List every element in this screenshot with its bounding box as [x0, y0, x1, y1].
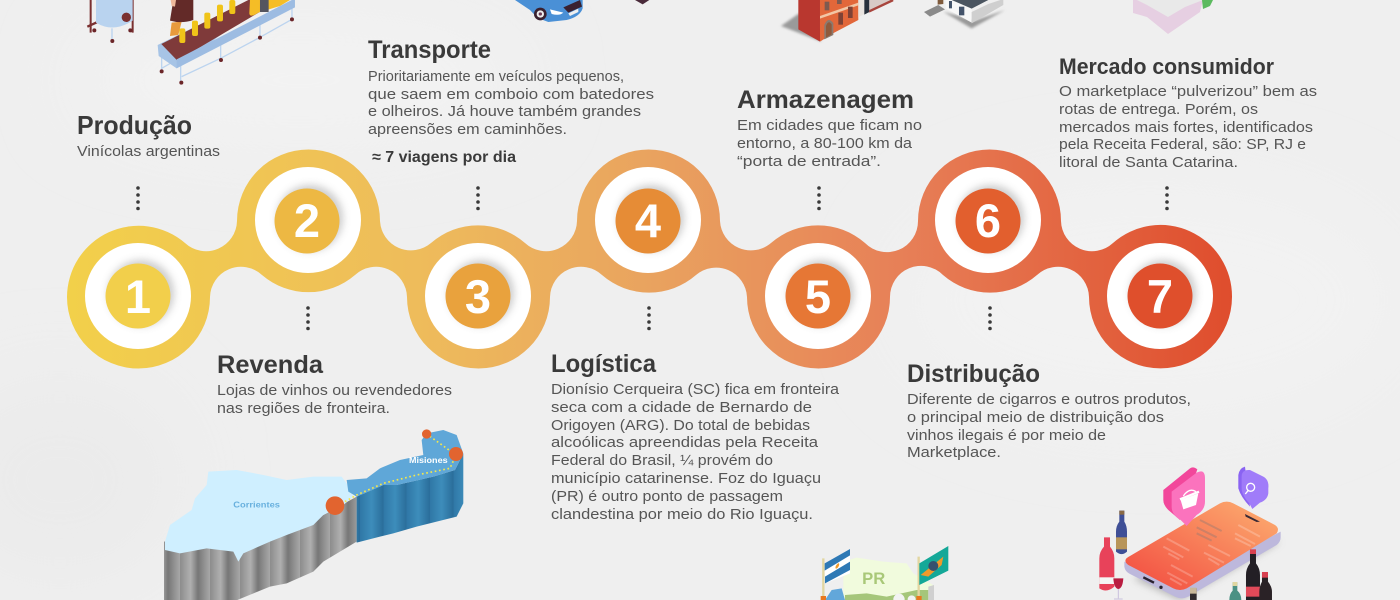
text: Produção description: Vinícolas argentinas	[77, 143, 220, 160]
text block: Distribução: vinhos ilegais é por meio de	[907, 427, 1106, 444]
text block: Mercado consumidor: pela Receita Federal, são: SP, RJ e	[1059, 136, 1306, 153]
text block: Logística	[551, 350, 840, 523]
step 4 marker	[595, 167, 701, 273]
step 3 marker: 3	[465, 270, 491, 323]
text block: Mercado consumidor	[1059, 54, 1317, 171]
text block: Distribução: Diferente de cigarros e outros produtos,	[907, 391, 1191, 408]
step 7 marker	[1107, 243, 1213, 349]
text block: Transporte: e olheiros. Já houve também grandes	[368, 103, 641, 120]
step 7 marker: 7	[1147, 270, 1173, 323]
step 2 marker: 2	[294, 194, 320, 247]
text block: Logística: Federal do Brasil, ¼ provém do	[551, 452, 773, 469]
text block: Logística: Dionísio Cerqueira (SC) fica em fronteira	[551, 381, 840, 398]
text block: Armazenagem: “porta de entrada”.	[737, 153, 881, 170]
text block: Logística: (PR) é outro ponto de passagem	[551, 488, 783, 505]
text block: Logística: alcoólicas apreendidas pela Receita	[551, 434, 819, 451]
illustration: winery tank and bottling conveyor	[87, 0, 295, 85]
text block: Revenda: nas regiões de fronteira.	[217, 400, 390, 417]
step 1 marker	[85, 243, 191, 349]
step 2 marker	[255, 167, 361, 273]
text block: Transporte: apreensões em caminhões.	[368, 121, 567, 138]
text block: Revenda: Lojas de vinhos ou revendedores	[217, 382, 452, 399]
text block: Armazenagem: Em cidades que ficam no	[737, 117, 922, 134]
text block: Armazenagem	[737, 86, 922, 170]
text block: Mercado consumidor: mercados mais fortes, identificados	[1059, 119, 1313, 136]
text block: Distribução: Marketplace.	[907, 444, 1001, 461]
text block: Transporte: Prioritariamente em veículos pequenos,	[368, 68, 624, 85]
text block: Revenda	[217, 351, 452, 417]
text block: Armazenagem: Armazenagem	[737, 86, 914, 114]
step 5 marker	[765, 243, 871, 349]
illustration: storehouse buildings	[781, 0, 1005, 42]
step 6 marker	[935, 167, 1041, 273]
step 4 marker: 4	[635, 194, 661, 247]
text block: Distribução	[907, 360, 1191, 461]
map: Corrientes and Misiones: Corrientes	[233, 500, 280, 510]
text block: Logística: município catarinense. Foz do Iguaçu	[551, 470, 821, 487]
illustration: PR map with flags	[821, 546, 948, 600]
text block: Distribução: o principal meio de distribuição dos	[907, 409, 1164, 426]
step 3 marker	[425, 243, 531, 349]
text block: Mercado consumidor: Mercado consumidor	[1059, 54, 1274, 79]
text block: Logística: Origoyen (ARG). Do total de bebidas	[551, 417, 810, 434]
text block: Mercado consumidor: O marketplace “pulverizou” bem as	[1059, 83, 1317, 100]
step 5 marker: 5	[805, 270, 831, 323]
text block: Logística: seca com a cidade de Bernardo de	[551, 399, 812, 416]
text block: Mercado consumidor: litoral de Santa Catarina.	[1059, 154, 1238, 171]
timeline band	[67, 150, 1232, 368]
dotted connectors	[136, 186, 1169, 330]
text block: Transporte: que saem em comboio com batedores	[368, 86, 654, 103]
text block: Logística: clandestina por meio do Rio Iguaçu.	[551, 506, 813, 523]
illustration: smartphone marketplace with bottles	[1099, 467, 1281, 600]
text block: Revenda: Revenda	[217, 351, 324, 379]
step 1 marker: 1	[125, 270, 151, 323]
text block: Distribução: Distribução	[907, 360, 1040, 388]
illustration: PR map with flags: PR	[862, 569, 885, 588]
heading: Produção: Produção	[77, 110, 192, 140]
text block: Armazenagem: entorno, a 80-100 km da	[737, 135, 913, 152]
text block: Mercado consumidor: rotas de entrega. Porém, os	[1059, 101, 1258, 118]
map: Corrientes and Misiones	[164, 429, 463, 600]
text block: Transporte: Transporte	[368, 36, 491, 64]
text block: Transporte	[368, 36, 654, 166]
map: Corrientes and Misiones: Misiones	[409, 455, 448, 465]
text block: Logística: Logística	[551, 350, 657, 378]
text block: Transporte: ≈ 7 viagens por dia	[372, 149, 516, 166]
illustration: pink state map	[1133, 0, 1213, 34]
step 6 marker: 6	[975, 194, 1001, 247]
illustration: blue car	[515, 0, 649, 22]
